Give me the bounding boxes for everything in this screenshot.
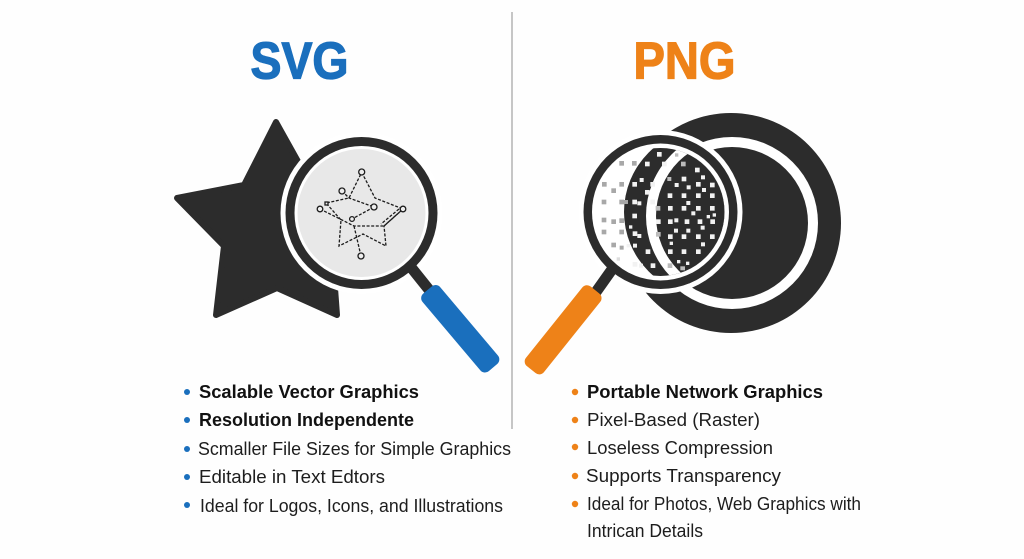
icon: magnifying glass: [280, 132, 502, 375]
dashed star outline with anchor points: [317, 169, 406, 259]
list: PNG features: Pixel-Based (Raster): [587, 410, 760, 430]
list: PNG features: Loseless Compression: [587, 438, 773, 458]
list: SVG features: Scmaller File Sizes for Simple Graphics: [198, 439, 511, 459]
magnifier blue handle: [419, 283, 502, 375]
list: PNG features: Supports Transparency: [586, 466, 781, 486]
list: PNG features: Intrican Details: [587, 521, 703, 541]
list: SVG features: Ideal for Logos, Icons, and Illustrations: [200, 496, 503, 516]
list: PNG features: Ideal for Photos, Web Graphics with: [587, 494, 861, 514]
list: SVG features: [184, 382, 511, 516]
magnified pixel circle: [624, 148, 724, 276]
heading: SVG: SVG: [250, 32, 348, 90]
list: SVG features: Resolution Independente: [199, 410, 414, 430]
icon: magnifying glass: [524, 130, 742, 374]
list: SVG features: Scalable Vector Graphics: [199, 382, 419, 402]
list: PNG features: [572, 382, 861, 541]
magnifier orange handle: [522, 283, 604, 377]
icon: dark circle with ring: [621, 113, 841, 333]
magnifier shaft: [596, 268, 613, 292]
panel: SVG: [177, 32, 511, 516]
icon: dark star: [177, 122, 340, 315]
light pixels: [627, 152, 716, 270]
list: PNG features: Portable Network Graphics: [587, 382, 823, 402]
faded pixels: [602, 161, 637, 261]
heading: PNG: PNG: [634, 32, 736, 90]
list: SVG features: Editable in Text Edtors: [199, 467, 385, 487]
magnifier shaft: [410, 266, 430, 291]
panel: PNG: [522, 32, 861, 541]
